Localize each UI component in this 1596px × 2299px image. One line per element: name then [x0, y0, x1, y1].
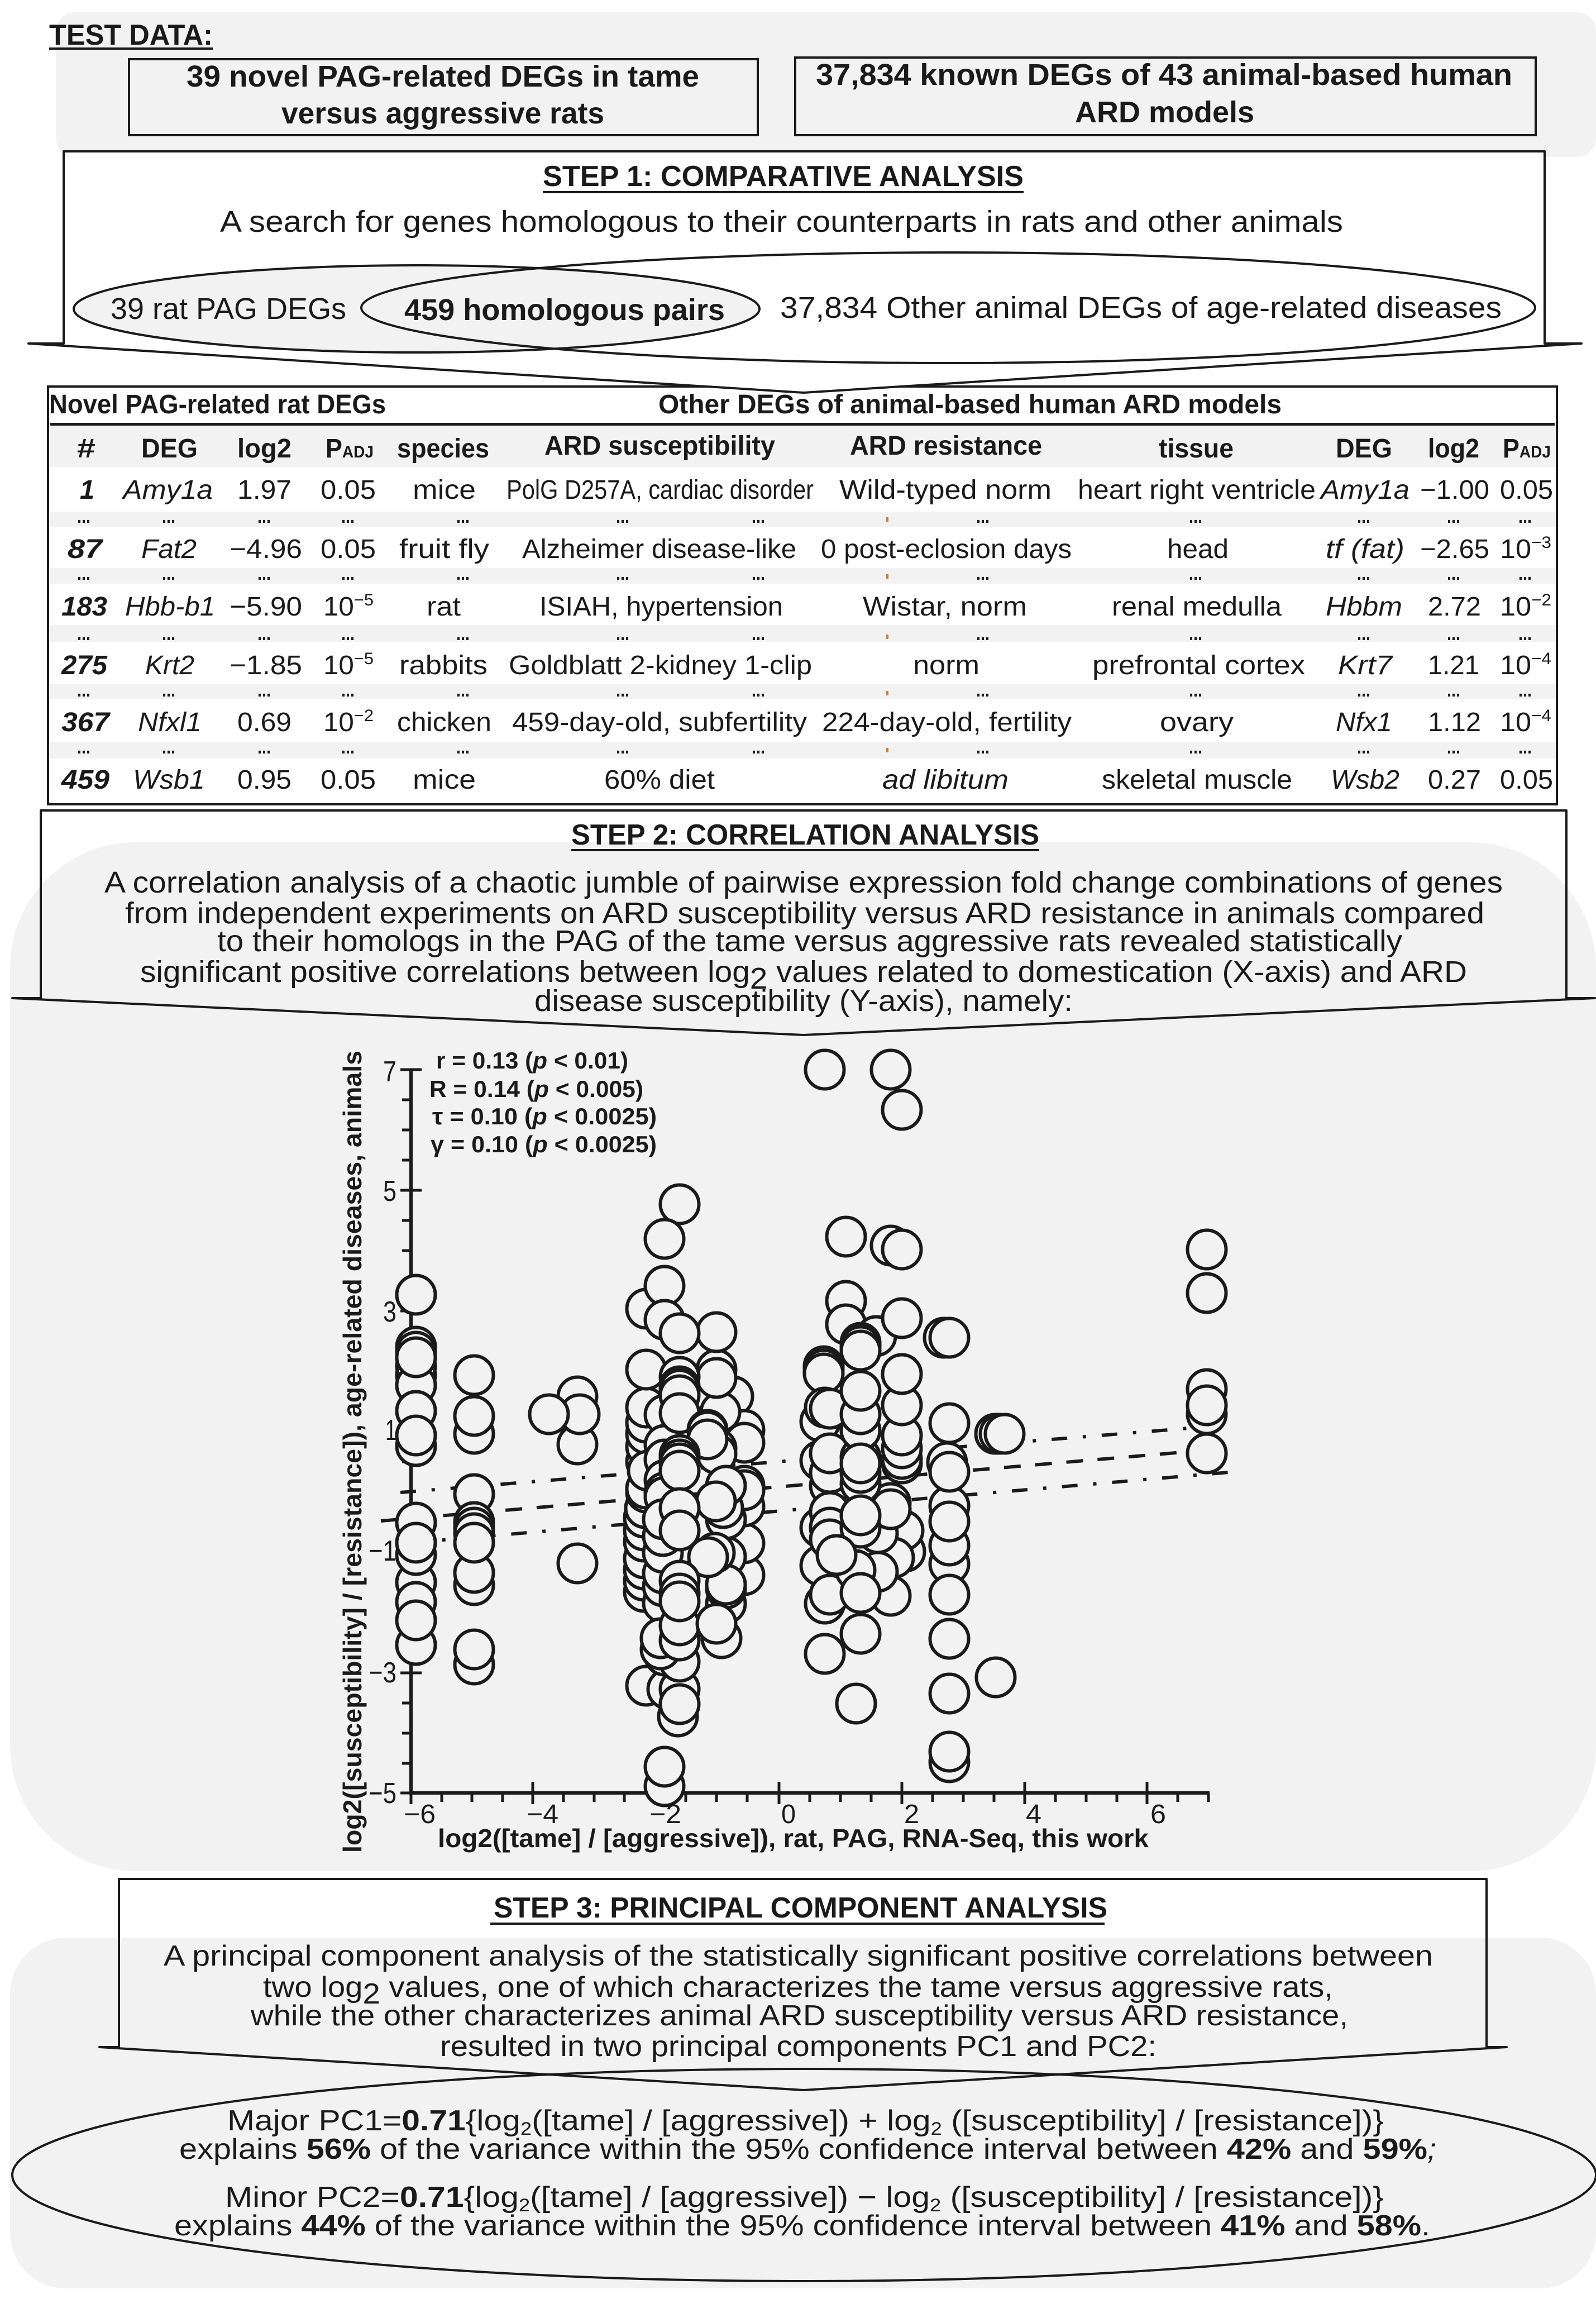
row separator dots: ... [77, 680, 90, 701]
row 1: 0.05 [1500, 475, 1553, 505]
row separator dots: ... [1447, 680, 1460, 701]
table column headers: # [77, 434, 95, 464]
row separator dots [77, 506, 1532, 527]
row 183: renal medulla [1112, 592, 1282, 622]
row separator dots: ... [616, 506, 629, 527]
row separator dots: ... [257, 506, 271, 527]
row separator dots: ... [341, 680, 355, 701]
row separator dots: ... [1357, 506, 1370, 527]
row 459: Wsb1 [133, 765, 205, 795]
row 1: Amy1a [1319, 475, 1409, 505]
row separator dots: ... [1447, 506, 1460, 527]
results ellipse: PC1 and PC2: 2 [931, 2119, 942, 2139]
row separator dots: ... [341, 563, 355, 584]
step 3 callout box [99, 1879, 1507, 2090]
x axis tick labels: 4 [1026, 1800, 1041, 1829]
x axis tick labels: −2 [649, 1800, 681, 1829]
row 367: 224-day-old, fertility [822, 708, 1072, 737]
row 183: −5 [354, 591, 374, 609]
row separator dots [77, 563, 1532, 584]
results ellipse: PC1 and PC2: ([tame] / [aggressive]) + log [532, 2105, 931, 2137]
results ellipse: PC1 and PC2: 2 [519, 2195, 530, 2215]
row separator dots: ... [616, 680, 629, 701]
results ellipse: PC1 and PC2 [12, 2069, 1596, 2281]
row separator dots: ... [456, 623, 470, 645]
row 275: rabbits [399, 651, 488, 680]
table column headers: PADJ [1503, 434, 1551, 464]
y axis tick labels: −3 [369, 1657, 396, 1689]
row separator dots: ... [1357, 563, 1370, 584]
box: rat DEGs: 39 novel PAG-related DEGs in tame [187, 60, 699, 93]
row 183 [61, 591, 1551, 622]
row 183: 2.72 [1428, 592, 1481, 622]
table column headers: tissue [1159, 434, 1234, 464]
row 183: 183 [61, 592, 107, 622]
row 275: prefrontal cortex [1092, 651, 1305, 680]
step 3 heading: STEP 3: PRINCIPAL COMPONENT ANALYSIS [494, 1892, 1107, 1924]
row 87 [68, 533, 1551, 564]
row separator dots: ... [752, 737, 765, 758]
row 87: 87 [68, 535, 104, 564]
row 87: tf (fat) [1326, 535, 1404, 564]
row separator dots: ... [77, 563, 90, 584]
table title row: Other DEGs of animal-based human ARD models [658, 390, 1282, 419]
step 2 description [104, 866, 1503, 1018]
regression line and confidence bands [381, 1428, 1229, 1543]
y axis title: log2([susceptibility] / [resistance]), age-related diseases, animals [338, 1051, 367, 1853]
row 1: heart right ventricle [1078, 475, 1316, 505]
x axis tick labels: −4 [527, 1800, 558, 1829]
y axis tick labels [369, 1056, 396, 1810]
row 183: ISIAH, hypertension [539, 592, 783, 622]
row 1: PolG D257A, cardiac disorder [506, 475, 814, 505]
row 459: 0.95 [237, 765, 292, 795]
row separator dots: ... [976, 506, 990, 527]
step 3 description: resulted in two principal components PC1 and PC2: [440, 2030, 1157, 2063]
row 275: 275 [61, 651, 108, 680]
row separator dots: ... [162, 623, 175, 645]
row 459: skeletal muscle [1102, 765, 1292, 795]
row 367: 367 [61, 708, 111, 737]
row 367: −4 [1531, 707, 1551, 725]
results ellipse: PC1 and PC2: 2 [520, 2119, 532, 2139]
row separator dots: ... [1447, 563, 1460, 584]
row 367: Nfx1 [1336, 708, 1392, 737]
row 459: 0.27 [1428, 765, 1481, 795]
row separator dots: ... [341, 506, 355, 527]
scatter chart [338, 1047, 1229, 1853]
row 1: Wild-typed norm [839, 475, 1052, 505]
table title row: Novel PAG-related rat DEGs [49, 390, 386, 419]
box: rat DEGs [129, 59, 758, 135]
row 87: −2.65 [1420, 535, 1489, 564]
row 275: Krt2 [145, 651, 194, 680]
row separator dots: ... [1518, 506, 1532, 527]
row separator dots: ... [1518, 737, 1532, 758]
step 2 description: values related to domestication (X-axis) and ARD [767, 955, 1467, 989]
correlation statistics [429, 1047, 657, 1157]
row separator dots: ... [1357, 680, 1370, 701]
results ellipse: PC1 and PC2: explains 56% of the variance within the 95% confidence interval between 42% and 59%; [179, 2133, 1436, 2166]
row separator dots: ... [456, 737, 470, 758]
x axis tick labels: −6 [404, 1800, 436, 1829]
venn: rat PAG DEGs and other animal DEGs: 459 homologous pairs [404, 293, 725, 327]
box: known DEGs [795, 58, 1536, 135]
row separator dots: ... [616, 623, 629, 645]
step 2 description: A correlation analysis of a chaotic jumble of pairwise expression fold change combinations of genes [104, 866, 1503, 899]
row 87: −4.96 [230, 535, 302, 564]
row 1: Amy1a [121, 475, 213, 505]
correlation statistics: R = 0.14 (p < 0.005) [429, 1076, 643, 1102]
venn: rat PAG DEGs and other animal DEGs: 37,834 Other animal DEGs of age-related diseases [780, 291, 1502, 325]
correlation statistics: γ = 0.10 (p < 0.0025) [431, 1131, 657, 1157]
row 459: 60% diet [604, 765, 715, 795]
x axis tick labels: 2 [904, 1800, 919, 1829]
row separator dots: ... [1447, 623, 1460, 645]
row separator dots: ... [976, 563, 990, 584]
table column headers: ARD susceptibility [544, 431, 775, 461]
row separator dots: ... [162, 680, 175, 701]
row 275: −5 [354, 650, 374, 668]
step 3 description: two log [263, 1971, 355, 2004]
row 367: 1.12 [1428, 708, 1481, 737]
row 367 [61, 707, 1551, 737]
row separator dots: ... [77, 737, 90, 758]
row separator dots [77, 680, 1532, 701]
row 367: 459-day-old, subfertility [512, 708, 807, 737]
row 459: ad libitum [882, 765, 1009, 795]
y axis tick labels: −1 [369, 1535, 396, 1567]
table title row [49, 390, 1282, 419]
row 87: Fat2 [141, 535, 197, 564]
row 87: fruit fly [399, 535, 489, 564]
step 2 description: to their homologs in the PAG of the tame versus aggressive rats revealed statistically [217, 924, 1402, 958]
step 1 heading: STEP 1: COMPARATIVE ANALYSIS [543, 160, 1024, 193]
row 183: Hbbm [1326, 592, 1402, 622]
venn: rat PAG DEGs and other animal DEGs [74, 252, 1535, 363]
row separator dots: ... [162, 737, 175, 758]
row separator dots: ... [976, 623, 990, 645]
table column headers: log2 [237, 434, 292, 464]
panel: step 2 background [10, 842, 1596, 1871]
results ellipse: PC1 and PC2: 2 [930, 2195, 941, 2215]
table column headers: DEG [1336, 434, 1392, 464]
row 367: −2 [354, 707, 374, 725]
row 275: −4 [1531, 650, 1551, 668]
y axis tick labels: −5 [369, 1777, 396, 1810]
row separator dots: ... [752, 563, 765, 584]
row 367: Nfxl1 [138, 708, 202, 737]
row separator dots: ... [257, 563, 271, 584]
row separator dots: ... [257, 680, 271, 701]
row 459: Wsb2 [1331, 765, 1399, 795]
row 367: 0.69 [237, 708, 292, 737]
row 183: Hbb-b1 [125, 592, 215, 622]
row 275: 10 [1500, 651, 1530, 680]
x axis tick labels [404, 1800, 1166, 1829]
box: known DEGs: ARD models [1075, 96, 1254, 129]
row separator dots: ... [257, 623, 271, 645]
row 367: chicken [397, 708, 491, 737]
row 459: 0.05 [1500, 765, 1553, 795]
row separator dots: ... [616, 737, 629, 758]
row separator dots: ... [1357, 737, 1370, 758]
results ellipse: PC1 and PC2: explains 44% of the variance within the 95% confidence interval between 41% and 58%. [174, 2210, 1430, 2242]
x axis tick labels: 0 [781, 1800, 796, 1829]
row separator dots: ... [1357, 623, 1370, 645]
row separator dots: ... [616, 563, 629, 584]
y axis tick labels: 3 [383, 1296, 396, 1328]
row separator dots: ... [162, 563, 175, 584]
panel: step 3 background [10, 1938, 1596, 2288]
results ellipse: PC1 and PC2: ([tame] / [aggressive]) − log [530, 2181, 930, 2214]
row 87: head [1167, 535, 1229, 564]
step 3 description: 2 [362, 1978, 380, 2010]
step 2 description: from independent experiments on ARD susceptibility versus ARD resistance in animals compared [125, 896, 1484, 930]
row separator dots: ... [162, 506, 175, 527]
correlation statistics: r = 0.13 (p < 0.01) [436, 1047, 628, 1074]
row 459: 0.05 [321, 765, 376, 795]
step 2 description: significant positive correlations between log [140, 955, 720, 989]
row separator dots: ... [1189, 563, 1202, 584]
row 87: 10 [1500, 535, 1530, 564]
row 1: −1.00 [1420, 475, 1489, 505]
box: known DEGs: 37,834 known DEGs of 43 animal-based human [816, 58, 1512, 92]
row separator dots: ... [752, 506, 765, 527]
table column headers: species [397, 434, 489, 464]
row 459: mice [413, 765, 476, 795]
row separator dots [77, 737, 1532, 758]
step 2 heading: STEP 2: CORRELATION ANALYSIS [571, 819, 1039, 851]
step 2 description: 2 [750, 962, 767, 995]
table column headers: log2 [1428, 434, 1479, 464]
y axis tick labels: 7 [383, 1056, 396, 1088]
row 367: 10 [323, 708, 353, 737]
row separator dots: ... [257, 737, 271, 758]
row separator dots: ... [456, 506, 470, 527]
row separator dots: ... [752, 623, 765, 645]
row 275: −1.85 [230, 651, 302, 680]
row separator dots: ... [976, 737, 990, 758]
results ellipse: PC1 and PC2: ([susceptibility] / [resistance])} [942, 2105, 1384, 2137]
row 275: 10 [323, 651, 353, 680]
row 183: 10 [323, 592, 353, 622]
row separator dots: ... [456, 680, 470, 701]
row 275: Krt7 [1338, 651, 1394, 680]
row 1: mice [413, 475, 476, 505]
x axis title: log2([tame] / [aggressive]), rat, PAG, RNA-Seq, this work [438, 1824, 1149, 1853]
row separator dots: ... [77, 623, 90, 645]
step 1 description: A search for genes homologous to their counterparts in rats and other animals [220, 205, 1343, 239]
row 183: 10 [1500, 592, 1530, 622]
results ellipse: PC1 and PC2: ([susceptibility] / [resistance])} [941, 2181, 1384, 2214]
step 1 callout box [28, 151, 1581, 393]
row 183: rat [427, 592, 461, 622]
step 3 description: while the other characterizes animal ARD susceptibility versus ARD resistance, [250, 2000, 1348, 2032]
row 275: 1.21 [1428, 651, 1479, 680]
row separator dots: ... [1189, 680, 1202, 701]
row separator dots: ... [1518, 680, 1532, 701]
row 1: 0.05 [321, 475, 376, 505]
row 1: 1.97 [237, 475, 292, 505]
row 183: Wistar, norm [863, 592, 1027, 622]
row 367: 10 [1500, 708, 1530, 737]
row 459 [61, 765, 1553, 795]
step 3 description: values, one of which characterizes the tame versus aggressive rats, [380, 1971, 1333, 2004]
row 275: norm [913, 651, 979, 680]
row 367: ovary [1160, 708, 1234, 737]
row 183: −2 [1531, 591, 1551, 609]
results ellipse: PC1 and PC2: Minor PC2= 0.71 {log [225, 2181, 512, 2214]
step 3 description [164, 1940, 1433, 2063]
row separator dots: ... [1447, 737, 1460, 758]
row 275: Goldblatt 2-kidney 1-clip [509, 651, 812, 680]
row 87: 0.05 [321, 535, 376, 564]
chart axes [400, 1070, 1210, 1804]
table column headers: PADJ [326, 434, 374, 464]
y axis tick labels: 5 [383, 1175, 396, 1208]
row separator dots: ... [1189, 737, 1202, 758]
heading: test data: TEST DATA: [49, 19, 213, 51]
row separator dots: ... [1189, 623, 1202, 645]
row separator dots [77, 623, 1532, 645]
row separator dots: ... [456, 563, 470, 584]
step 3 description: A principal component analysis of the statistically significant positive correlations between [164, 1940, 1433, 1972]
data points [396, 1050, 1226, 1805]
box: rat DEGs: versus aggressive rats [281, 97, 604, 130]
table column headers: ARD resistance [850, 431, 1042, 461]
row separator dots: ... [976, 680, 990, 701]
row 87: −3 [1531, 533, 1551, 552]
row 1 [80, 475, 1553, 505]
results ellipse: PC1 and PC2: Major PC1= 0.71 {log [227, 2105, 514, 2137]
venn: rat PAG DEGs and other animal DEGs: 39 rat PAG DEGs [111, 292, 346, 326]
table column headers: DEG [141, 434, 198, 464]
row 87: 0 post-eclosion days [821, 535, 1072, 564]
row separator dots: ... [341, 737, 355, 758]
y axis tick labels: 1 [385, 1414, 396, 1447]
panel: test data background [56, 12, 1596, 157]
row 1: 1 [80, 475, 94, 505]
row separator dots: ... [1518, 623, 1532, 645]
row 275 [61, 650, 1551, 680]
step 2 callout box [12, 810, 1595, 1035]
row 183: −5.90 [230, 592, 302, 622]
row separator dots: ... [341, 623, 355, 645]
row separator dots: ... [77, 506, 90, 527]
row 87: Alzheimer disease-like [522, 535, 796, 564]
x axis tick labels: 6 [1150, 1800, 1166, 1829]
row separator dots: ... [1189, 506, 1202, 527]
row 459: 459 [61, 765, 109, 795]
row separator dots: ... [1518, 563, 1532, 584]
table column headers [77, 431, 1551, 464]
row separator dots: ... [752, 680, 765, 701]
step 2 description: disease susceptibility (Y-axis), namely: [534, 984, 1073, 1018]
correlation statistics: τ = 0.10 (p < 0.0025) [432, 1103, 657, 1129]
table: homologous pairs [48, 387, 1557, 804]
